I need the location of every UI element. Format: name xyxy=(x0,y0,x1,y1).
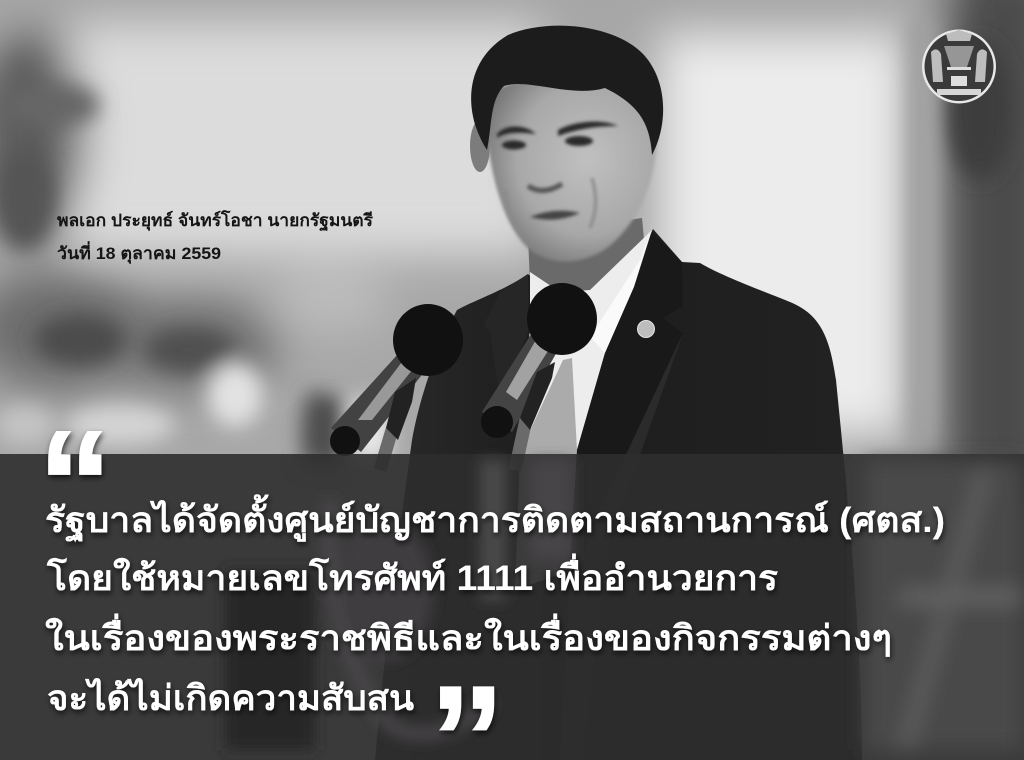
microphone right xyxy=(481,283,597,438)
dark quote band xyxy=(0,454,1024,760)
head xyxy=(470,26,663,261)
lapel edge xyxy=(560,333,683,760)
stand xyxy=(380,410,528,470)
caption: name and date: พลเอก ประยุทธ์ จันทร์โอชา นายกรัฐมนตรี xyxy=(57,210,374,232)
quote text: โดยใช้หมายเลขโทรศัพท์ 1111 เพื่ออำนวยการ xyxy=(46,553,778,598)
face xyxy=(484,76,657,261)
shirt and collar xyxy=(520,230,652,580)
quote text xyxy=(45,494,945,718)
nose and mouth xyxy=(505,178,596,232)
figure: speaker xyxy=(375,26,862,760)
opening quote mark: “ xyxy=(38,399,112,567)
photo showing through band xyxy=(225,460,1024,750)
quote text: ในเรื่องของพระราชพิธีและในเรื่องของกิจกรรมต่างๆ xyxy=(45,613,892,658)
left lapel xyxy=(483,274,529,400)
microphones xyxy=(330,283,597,470)
hair xyxy=(471,26,663,155)
caption: name and date: วันที่ 18 ตุลาคม 2559 xyxy=(57,241,221,264)
suit jacket xyxy=(375,229,862,760)
neck xyxy=(528,218,645,300)
quote text: รัฐบาลได้จัดตั้งศูนย์บัญชาการติดตามสถานการณ์ (ศตส.) xyxy=(45,494,945,543)
ear xyxy=(470,120,490,172)
emblem seal xyxy=(922,30,996,104)
closing quote mark: ,, xyxy=(431,581,497,738)
right lapel xyxy=(570,232,683,560)
microphone left xyxy=(330,304,463,456)
quote text: จะได้ไม่เกิดความสับสน xyxy=(47,677,414,718)
tie xyxy=(515,358,577,590)
brows and eyes xyxy=(497,122,618,150)
lapel pin xyxy=(638,320,654,338)
caption: name and date xyxy=(57,210,374,264)
